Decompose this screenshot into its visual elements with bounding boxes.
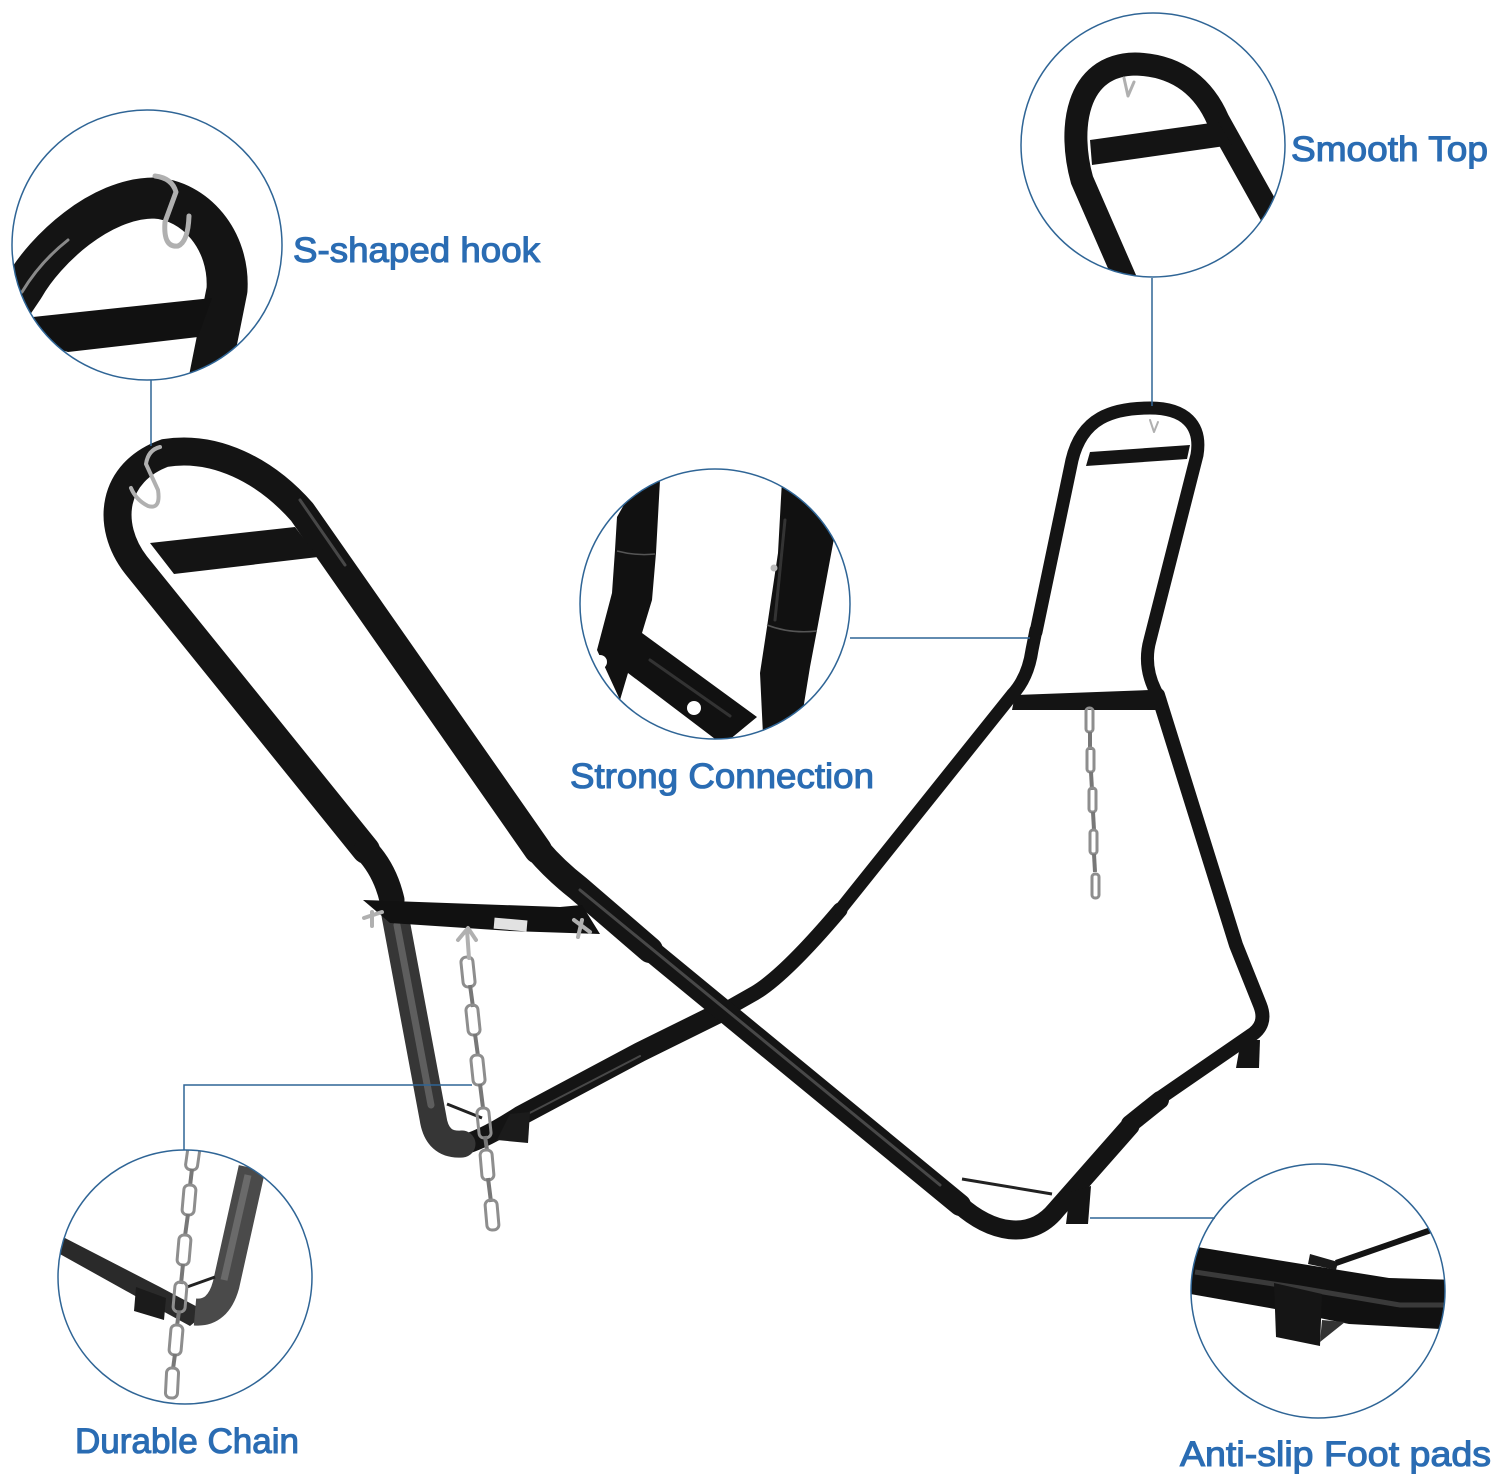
detail: arch with hook bbox=[0, 176, 227, 400]
label: durable chain: Durable Chain bbox=[75, 1422, 299, 1461]
left arch top bar bbox=[150, 527, 318, 574]
foot pads bbox=[497, 1040, 1260, 1224]
wire rods bbox=[447, 1104, 1052, 1194]
callout: durable chain bbox=[58, 1139, 312, 1461]
detail: smooth top arch bbox=[1076, 64, 1285, 290]
hammock stand frame bbox=[118, 408, 1262, 1230]
label: strong connection: Strong Connection bbox=[570, 757, 874, 796]
connector lines bbox=[151, 278, 1215, 1218]
detail: chain and corner bbox=[58, 1139, 252, 1398]
top bar of right arch bbox=[1086, 445, 1190, 466]
circle outline bbox=[580, 469, 850, 739]
callout: strong connection bbox=[570, 469, 874, 796]
callout: s-shaped hook bbox=[0, 110, 541, 400]
circle outline bbox=[58, 1150, 312, 1404]
label: s-shaped hook: S-shaped hook bbox=[293, 231, 541, 270]
circle outline bbox=[12, 110, 282, 380]
callout: anti-slip foot pads bbox=[1180, 1164, 1491, 1474]
detail: foot pad on tube bbox=[1185, 1229, 1460, 1346]
callout: smooth top bbox=[1021, 13, 1488, 290]
left lower cross bar bbox=[363, 900, 600, 934]
small hook at right arch bbox=[1150, 420, 1158, 432]
detail: tube connection bbox=[593, 480, 835, 745]
left chain bbox=[458, 928, 499, 1230]
circle outline bbox=[1021, 13, 1285, 277]
label: anti-slip foot pads: Anti-slip Foot pads bbox=[1180, 1435, 1491, 1474]
circle outline bbox=[1191, 1164, 1445, 1418]
right chain bbox=[1086, 708, 1099, 898]
right upper cross bar bbox=[1012, 690, 1160, 710]
wing bolts bbox=[364, 912, 590, 937]
s-hook on stand bbox=[131, 447, 160, 507]
left arch tube bbox=[118, 452, 960, 1205]
label: smooth top: Smooth Top bbox=[1291, 130, 1488, 169]
right frame tube bbox=[458, 408, 1262, 1230]
left lower leg bbox=[395, 915, 462, 1144]
